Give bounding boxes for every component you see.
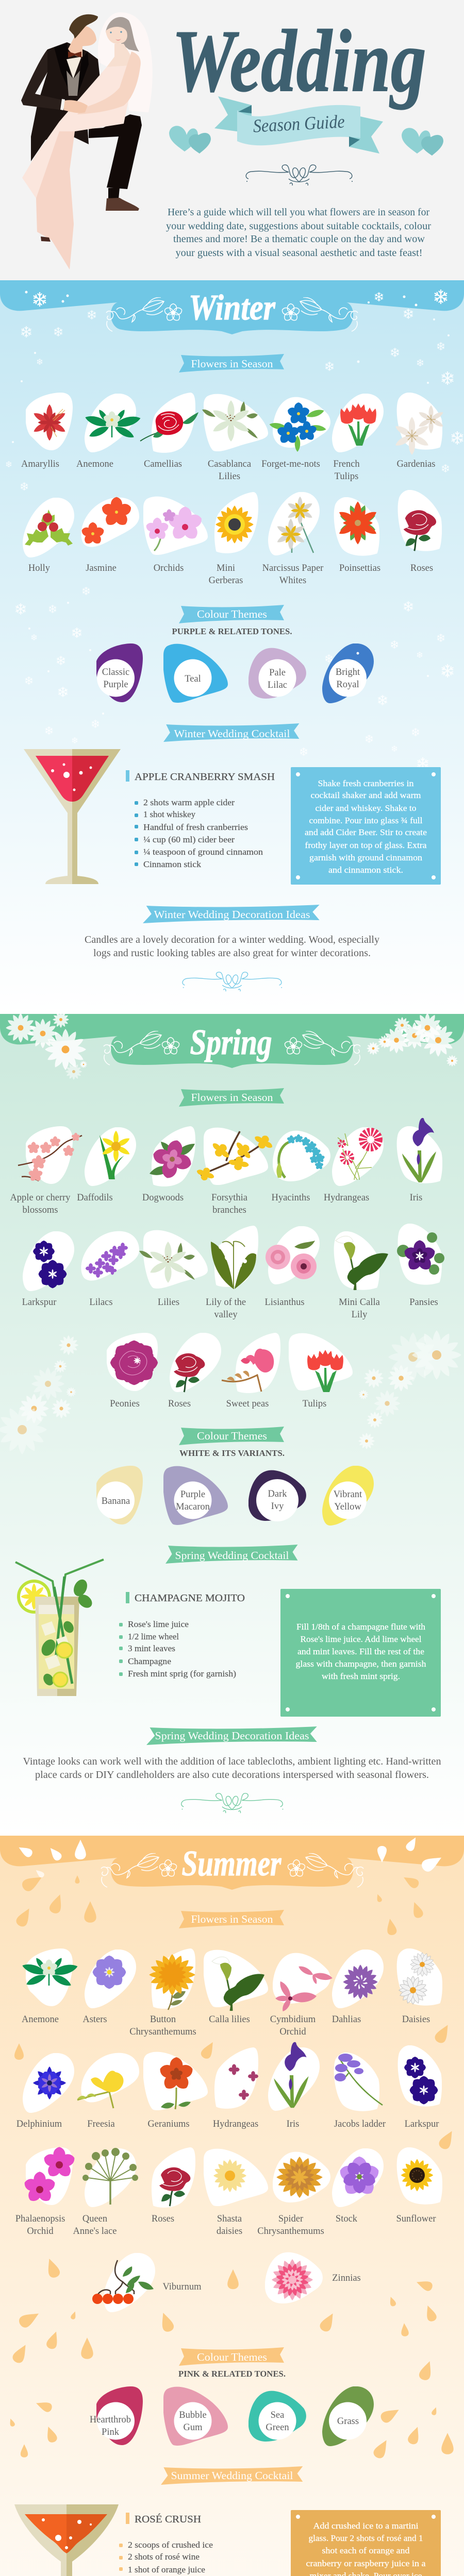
flower: Viburnum	[92, 2253, 202, 2312]
flower: Geraniums: Geraniums	[147, 2119, 190, 2129]
swatch: Pale Lilac	[248, 648, 306, 699]
panel: spring	[0, 1008, 464, 1836]
flower: Queen Anne's lace: Anne's lace	[73, 2226, 117, 2236]
flower: Larkspur: Larkspur	[405, 2119, 439, 2129]
ribbon: Flowers in Season	[179, 1088, 284, 1107]
flower: Holly	[23, 498, 74, 573]
flower: Hydrangeas: Hydrangeas	[324, 1193, 369, 1203]
ribbon: Flowers in Season	[179, 1910, 284, 1928]
ribbon: Winter Wedding Decoration Ideas	[143, 905, 320, 923]
method box: cranberry or raspberry juice in a	[306, 2558, 426, 2568]
flower: Roses: Roses	[168, 1399, 191, 1409]
method box: Shake fresh cranberries in	[318, 778, 413, 788]
flower: Larkspur: Larkspur	[22, 1297, 56, 1308]
flower: Stock: Stock	[336, 2214, 358, 2224]
flower: Hyacinths	[271, 1131, 330, 1203]
swatch: Purple Macaron	[163, 1466, 228, 1525]
flower: Jacobs ladder	[334, 2053, 386, 2129]
method box: Add crushed ice to a martini	[313, 2521, 419, 2531]
flower: Orchids: Orchids	[154, 563, 184, 573]
flower: Pansies	[397, 1224, 444, 1308]
flower: Lily of the valley: Lily of the	[206, 1297, 246, 1308]
flower: Amaryllis	[21, 393, 73, 469]
flower: Dahlias: Dahlias	[332, 2014, 361, 2025]
flower: Iris: Iris	[287, 2119, 299, 2129]
flower: Narcissus Paper Whites: Whites	[279, 575, 306, 586]
swatch: Sea Green: Green	[266, 2422, 289, 2433]
ribbon: Spring Wedding Cocktail: Spring Wedding Cocktail	[175, 1549, 289, 1562]
flower: Gardenias: Gardenias	[397, 459, 435, 469]
flower: Forsythia branches: branches	[212, 1205, 246, 1215]
icon: hearts right	[402, 128, 443, 156]
heading band: Winter	[0, 280, 464, 334]
ingredient list: 1 shot whiskey	[143, 809, 196, 819]
swatch: Bright Royal	[322, 643, 374, 703]
flower: Roses: Roses	[152, 2214, 174, 2224]
swatch: Heartthrob Pink: Pink	[102, 2427, 120, 2437]
flower: French Tulips: Tulips	[335, 471, 358, 482]
ribbon: Flowers in Season	[179, 354, 284, 372]
ingredient list: 1/2 lime wheel	[128, 1632, 179, 1641]
swatch: Purple Macaron: Macaron	[176, 1502, 210, 1512]
flower: Roses	[168, 1333, 221, 1409]
flower: Forsythia branches	[194, 1128, 276, 1215]
illustration: martini glass	[24, 749, 121, 884]
illustration: mojito glass	[15, 1560, 104, 1696]
flower: Shasta daisies: daisies	[217, 2226, 242, 2236]
heading band: Summer	[0, 1835, 464, 1890]
swatch: Classic Purple: Classic	[102, 667, 129, 677]
flower: Amaryllis: Amaryllis	[21, 459, 59, 469]
ribbon: Colour Themes: Colour Themes	[197, 2351, 267, 2363]
flower: Lilacs: Lilacs	[89, 1297, 113, 1308]
flower: Hydrangeas	[213, 2047, 258, 2129]
flower: Camellias	[140, 393, 198, 469]
method box: glass with champagne, then garnish	[296, 1659, 426, 1669]
flower: Geraniums	[143, 2052, 208, 2129]
flower: Calla lilies: Calla lilies	[209, 2014, 250, 2025]
flower: Roses	[152, 2147, 195, 2224]
flower: Peonies	[106, 1333, 161, 1409]
flower: Camellias: Camellias	[144, 459, 182, 469]
swatch: Dark Ivy: Ivy	[271, 1501, 284, 1512]
ribbon: Flowers in Season: Flowers in Season	[191, 358, 273, 370]
method box: Rose's lime juice. Add lime wheel	[300, 1634, 422, 1644]
flower: Anemone: Anemone	[76, 459, 113, 469]
ingredient list	[135, 798, 263, 869]
ingredient list: Cinnamon stick	[143, 859, 202, 869]
method box: cider and whiskey. Shake to	[316, 803, 417, 813]
flower: Lilies	[139, 1230, 208, 1308]
heading band: Spring: Spring	[190, 1023, 272, 1062]
ingredient list: 2 shots of rosé wine	[128, 2552, 200, 2562]
flower: Forget-me-nots	[261, 397, 330, 469]
flower: Spider Chrysanthemums	[257, 2150, 330, 2236]
ornament: spring divider	[181, 1793, 283, 1813]
text: winter decoration: Candles are a lovely decoration for a winter wedding. Wood, especially	[85, 934, 379, 945]
ribbon: Summer Wedding Cocktail: Summer Wedding Cocktail	[171, 2469, 293, 2482]
flower: French Tulips: French	[333, 459, 360, 469]
flower: Tulips: Tulips	[303, 1399, 326, 1409]
flower: Anemone	[21, 1948, 79, 2025]
flower: Lisianthus	[264, 1226, 320, 1308]
flower: Delphinium	[16, 2053, 74, 2129]
flower: Jasmine: Jasmine	[86, 563, 117, 573]
ribbon: Flowers in Season: Flowers in Season	[191, 1913, 273, 1925]
heading band: Winter: Winter	[189, 288, 276, 328]
swatch: Classic Purple	[96, 643, 143, 702]
flower: Calla lilies	[203, 1950, 268, 2025]
ingredient list: 2 scoops of crushed ice	[128, 2540, 213, 2550]
method box: with fresh mint sprig.	[322, 1671, 400, 1681]
flower: Roses	[398, 490, 442, 573]
intro paragraph: themes and more! Be a thematic couple on the day and wow	[173, 234, 425, 245]
swatch: Sea Green	[248, 2391, 306, 2442]
swatch: Banana: Banana	[102, 1496, 130, 1506]
swatch: Dark Ivy	[248, 1470, 306, 1521]
ingredient list: 1 shot of orange juice	[128, 2565, 205, 2574]
flower: Delphinium: Delphinium	[16, 2119, 62, 2129]
flower: Sweet peas: Sweet peas	[226, 1399, 269, 1409]
flower: Apple or cherry blossoms	[10, 1126, 82, 1215]
flower: Apple or cherry blossoms: blossoms	[23, 1205, 58, 1215]
flower: Mini Calla Lily	[334, 1231, 388, 1320]
swatch: Bright Royal: Royal	[336, 680, 359, 690]
flower: Holly: Holly	[28, 563, 51, 573]
flower: Casablanca Lilies: Lilies	[219, 471, 240, 482]
flower: Dogwoods	[142, 1126, 196, 1203]
flower: Cymbidium Orchid: Cymbidium	[270, 2014, 316, 2025]
ingredient list: Fresh mint sprig (for garnish)	[128, 1669, 236, 1679]
flower: Mini Gerberas: Mini	[217, 563, 235, 573]
swatch: Grass	[322, 2386, 374, 2446]
ingredient list: Champagne	[128, 1656, 171, 1666]
intro paragraph: Here’s a guide which will tell you what flowers are in season for	[168, 207, 430, 218]
recipe title: Champagne Mojito: CHAMPAGNE MOJITO	[135, 1592, 245, 1604]
flower: Gardenias	[394, 393, 444, 469]
flower: Casablanca Lilies	[202, 394, 268, 482]
flower: Roses: Roses	[410, 563, 433, 573]
flower: Peonies: Peonies	[110, 1399, 140, 1409]
method box: shot each of orange and	[322, 2546, 410, 2555]
flower: Mini Calla Lily: Lily	[352, 1310, 368, 1320]
flower: Lily of the valley: valley	[214, 1310, 238, 1320]
swatch: Purple Macaron: Purple	[180, 1489, 205, 1500]
swatch: Teal: Teal	[185, 674, 201, 684]
flower: Anemone	[76, 394, 142, 469]
ribbon: Season Guide: Season Guide	[253, 111, 345, 137]
flower: Orchids	[143, 497, 208, 573]
ingredient list: Rose's lime juice	[128, 1619, 189, 1629]
flower: Poinsettias	[333, 497, 383, 573]
method box: and add Cider Beer. Stir to create	[305, 827, 427, 837]
flower: Mini Calla Lily: Mini Calla	[339, 1297, 380, 1308]
flower: Larkspur	[22, 1231, 74, 1308]
flower: Lilies: Lilies	[158, 1297, 179, 1308]
decoration: snowflakes	[6, 286, 464, 770]
flower: Sweet peas	[222, 1333, 280, 1409]
ingredient list	[119, 1619, 236, 1679]
panel: intro header	[0, 0, 464, 280]
flower: Zinnias: Zinnias	[332, 2273, 361, 2283]
flower: Narcissus Paper Whites: Narcissus Paper	[262, 563, 323, 573]
flower: Spider Chrysanthemums: Spider	[278, 2214, 303, 2224]
ingredient list	[119, 2540, 284, 2576]
ornament: winter divider	[183, 972, 282, 991]
flower: Narcissus Paper Whites	[262, 492, 323, 586]
subheading: white variants: WHITE & ITS VARIANTS.	[179, 1448, 285, 1458]
flower: Dahlias	[332, 1950, 384, 2025]
heading band: Spring	[0, 1014, 464, 1068]
flower: Apple or cherry blossoms: Apple or cherry	[10, 1193, 71, 1203]
flower: Mini Gerberas: Gerberas	[209, 575, 243, 586]
text: spring decoration: Vintage looks can work well with the addition of lace tablecloths, ambient lighting etc. Hand-written	[23, 1756, 441, 1767]
recipe title: Apple Cranberry Smash: APPLE CRANBERRY SMASH	[135, 771, 275, 783]
decoration: petals	[8, 1872, 457, 2460]
heading band: Summer: Summer	[181, 1844, 281, 1884]
ornament: divider	[246, 165, 353, 185]
text: spring decoration	[23, 1756, 441, 1781]
flower: Stock	[332, 2148, 384, 2224]
ingredient list: Handful of fresh cranberries	[143, 822, 248, 832]
flower: Freesia: Freesia	[87, 2119, 115, 2129]
flower: Hydrangeas: Hydrangeas	[213, 2119, 258, 2129]
flower: Asters: Asters	[82, 2014, 107, 2025]
ribbon: Colour Themes: Colour Themes	[197, 608, 267, 620]
flower: Forget-me-nots: Forget-me-nots	[261, 459, 320, 469]
flower: Tulips	[288, 1333, 353, 1409]
flower: Phalaenopsis Orchid: Phalaenopsis	[15, 2214, 65, 2224]
subheading: pink tones: PINK & RELATED TONES.	[178, 2369, 286, 2379]
ribbon: Colour Themes	[179, 605, 284, 623]
method box: garnish with ground cinnamon	[309, 853, 422, 862]
flower: Phalaenopsis Orchid: Orchid	[27, 2226, 54, 2236]
swatch: Sea Green: Sea	[271, 2410, 284, 2420]
flower: Asters	[82, 1950, 136, 2025]
flower: French Tulips	[332, 394, 384, 482]
swatch: Vibrant Yellow	[322, 1466, 374, 1526]
swatch: Pale Lilac: Lilac	[268, 680, 287, 690]
method box: frothy layer on top of glass. Extra	[305, 840, 427, 850]
flower: Iris	[268, 2042, 320, 2129]
flower: Daffodils	[77, 1127, 136, 1203]
method box	[291, 2510, 441, 2576]
ingredient list: ¼ teaspoon of ground cinnamon	[143, 847, 263, 857]
flower: Mini Gerberas	[209, 492, 259, 586]
flower: Dogwoods: Dogwoods	[142, 1193, 184, 1203]
ingredient list: 3 mint leaves	[128, 1643, 175, 1653]
ribbon: Colour Themes	[179, 1427, 284, 1445]
method box	[280, 1589, 441, 1717]
text: spring decoration: place cards or DIY candleholders are also cute decorations interspersed with seasonal flowers.	[35, 1769, 429, 1781]
subheading: purple tones: PURPLE & RELATED TONES.	[172, 626, 292, 636]
swatch: Classic Purple: Purple	[103, 680, 128, 690]
ribbon: Summer Wedding Cocktail	[161, 2466, 303, 2485]
method box: cocktail shaker and add warm	[310, 790, 421, 800]
swatch: Heartthrob Pink	[90, 2386, 143, 2445]
swatch: Banana	[96, 1466, 143, 1524]
flower: Sunflower: Sunflower	[396, 2214, 436, 2224]
ribbon: Spring Wedding Decoration Ideas	[146, 1726, 317, 1745]
method box: and mint leaves. Fill the rest of the	[297, 1647, 424, 1656]
flower: Zinnias	[265, 2252, 361, 2307]
method box	[291, 767, 441, 885]
panel: winter	[0, 280, 464, 1014]
swatch: Heartthrob Pink: Heartthrob	[90, 2415, 131, 2425]
flower: Lilacs	[81, 1231, 139, 1308]
swatch: Pale Lilac: Pale	[269, 668, 286, 678]
flower: Poinsettias: Poinsettias	[339, 563, 380, 573]
swatch: Vibrant Yellow: Yellow	[334, 1502, 361, 1512]
intro paragraph: your guests with a visual seasonal aesthetic and taste feast!	[175, 248, 423, 259]
flower: Cymbidium Orchid: Orchid	[279, 2027, 306, 2037]
flower: Forsythia branches: Forsythia	[211, 1193, 247, 1203]
ribbon: Season Guide	[214, 96, 383, 154]
method box: combine. Pour into glass ¾ full	[309, 816, 423, 825]
flower: Queen Anne's lace: Queen	[82, 2214, 107, 2224]
icon: hearts left	[169, 126, 211, 154]
swatch: Grass: Grass	[337, 2416, 359, 2427]
swatch: Bright Royal: Bright	[336, 667, 360, 677]
flower: Viburnum: Viburnum	[163, 2282, 202, 2292]
intro paragraph	[166, 207, 432, 259]
method box: Fill 1/8th of a champagne flute with	[296, 1622, 426, 1632]
panel: summer	[0, 1835, 464, 2576]
flower: Freesia	[77, 2053, 139, 2129]
ingredient list: 2 shots warm apple cider	[143, 798, 235, 807]
method box: glass. Pour 2 shots of rosé and 1	[308, 2533, 423, 2543]
flower: Shasta daisies: Shasta	[217, 2214, 242, 2224]
swatch: Dark Ivy: Dark	[268, 1489, 287, 1499]
illustration: margarita glass	[14, 2504, 119, 2576]
flower: Button Chrysanthemums: Button	[150, 2014, 176, 2025]
flower: Shasta daisies	[203, 2149, 268, 2236]
swatch: Bubble Gum: Gum	[184, 2422, 203, 2433]
flower: Phalaenopsis Orchid	[15, 2147, 76, 2236]
flower: Cymbidium Orchid	[270, 1953, 333, 2037]
swatch: Vibrant Yellow: Vibrant	[334, 1489, 362, 1500]
flower: Spider Chrysanthemums: Chrysanthemums	[257, 2226, 324, 2236]
flower: Iris: Iris	[410, 1193, 422, 1203]
flower: Button Chrysanthemums	[129, 1948, 203, 2037]
ingredient list: ¼ cup (60 ml) cider beer	[143, 835, 235, 844]
method box: and cinnamon stick.	[328, 865, 403, 875]
ribbon: Winter Wedding Cocktail	[163, 723, 299, 742]
flower: Pansies: Pansies	[409, 1297, 438, 1308]
intro paragraph: your wedding date, suggestions about suitable cocktails, colour	[166, 221, 432, 232]
flower: Daffodils: Daffodils	[77, 1193, 113, 1203]
flower: Queen Anne's lace	[73, 2148, 138, 2236]
flower: Lily of the valley	[206, 1226, 258, 1320]
flower: Hydrangeas	[324, 1127, 384, 1203]
flower: Lisianthus: Lisianthus	[264, 1297, 305, 1308]
swatch: Teal	[163, 644, 228, 703]
flower: Jacobs ladder: Jacobs ladder	[334, 2119, 386, 2129]
ribbon: Flowers in Season: Flowers in Season	[191, 1091, 273, 1104]
flower: Sunflower	[396, 2147, 442, 2224]
flower: Hyacinths: Hyacinths	[271, 1193, 310, 1203]
ribbon: Colour Themes	[179, 2347, 284, 2366]
swatch: Bubble Gum: Bubble	[179, 2410, 207, 2420]
flower: Daisies	[394, 1948, 442, 2025]
flower: Jasmine	[80, 497, 139, 573]
ribbon: Colour Themes: Colour Themes	[197, 1430, 267, 1442]
swatch: Bubble Gum	[163, 2387, 228, 2446]
flower: Iris	[397, 1118, 442, 1203]
recipe title: Rosé Crush: ROSÉ CRUSH	[135, 2513, 201, 2525]
ribbon: Spring Wedding Cocktail	[165, 1545, 297, 1564]
ribbon: Winter Wedding Decoration Ideas: Winter Wedding Decoration Ideas	[154, 908, 310, 921]
flower: Anemone: Anemone	[22, 2014, 59, 2025]
flower: Larkspur	[398, 2045, 442, 2129]
ribbon: Spring Wedding Decoration Ideas: Spring Wedding Decoration Ideas	[155, 1730, 309, 1742]
flower: Casablanca Lilies: Casablanca	[208, 459, 251, 469]
flower: Daisies: Daisies	[402, 2014, 430, 2025]
decoration: daisies	[0, 1008, 464, 1463]
text: winter decoration: logs and rustic looking tables are also great for winter decorations.	[93, 947, 371, 959]
flower: Button Chrysanthemums: Chrysanthemums	[129, 2027, 196, 2037]
ribbon: Winter Wedding Cocktail: Winter Wedding Cocktail	[174, 727, 290, 740]
text: winter decoration	[85, 934, 379, 959]
illustration: bride and groom	[21, 12, 153, 269]
